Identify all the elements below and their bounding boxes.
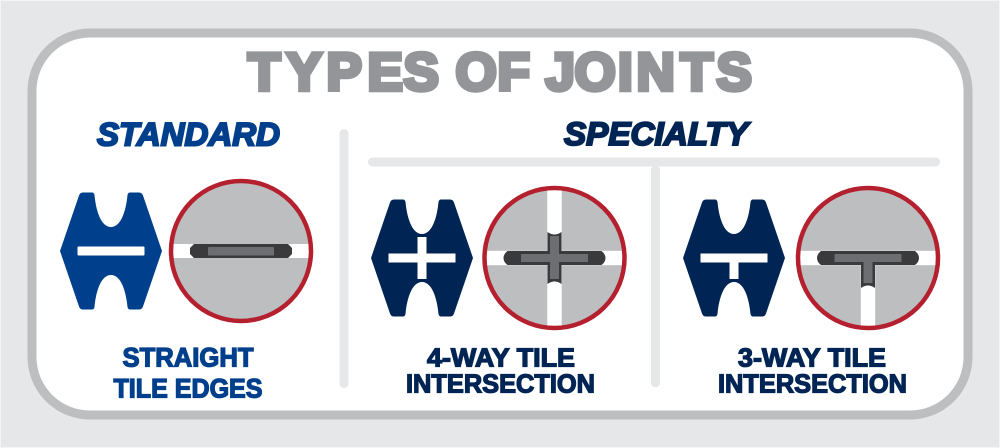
label: 3-way tile intersection: INTERSECTION [718, 368, 907, 398]
divider: specialty columns [651, 166, 660, 387]
label: straight tile edges [114, 343, 262, 404]
icon: 3-way joint spacer [683, 200, 785, 316]
label: 4-way tile intersection: INTERSECTION [406, 368, 595, 398]
panel: main rounded frame [32, 33, 968, 415]
label: 4-way tile intersection: 4-WAY TILE [427, 342, 575, 372]
label: 3-way tile intersection [718, 342, 907, 398]
heading: specialty: SPECIALTY [564, 116, 751, 152]
panel: 4-way joint [371, 188, 624, 398]
label: 3-way tile intersection: 3-WAY TILE [738, 342, 886, 372]
label: straight tile edges: STRAIGHT [122, 343, 254, 373]
divider: standard and specialty [340, 129, 348, 388]
icon: 3-way joint close-up [798, 188, 938, 328]
title: TYPES OF JOINTS [248, 43, 752, 102]
panel: 3-way joint [683, 188, 938, 398]
icon: straight joint spacer [60, 192, 162, 310]
icon: 4-way joint close-up [484, 188, 624, 328]
label: 4-way tile intersection [406, 342, 595, 398]
icon: 4-way joint spacer [371, 200, 473, 316]
panel: standard straight joint [60, 181, 311, 404]
label: straight tile edges: TILE EDGES [114, 374, 262, 404]
divider: specialty heading [368, 158, 940, 166]
icon: straight joint close-up [171, 181, 311, 321]
heading: standard: STANDARD [97, 116, 280, 152]
